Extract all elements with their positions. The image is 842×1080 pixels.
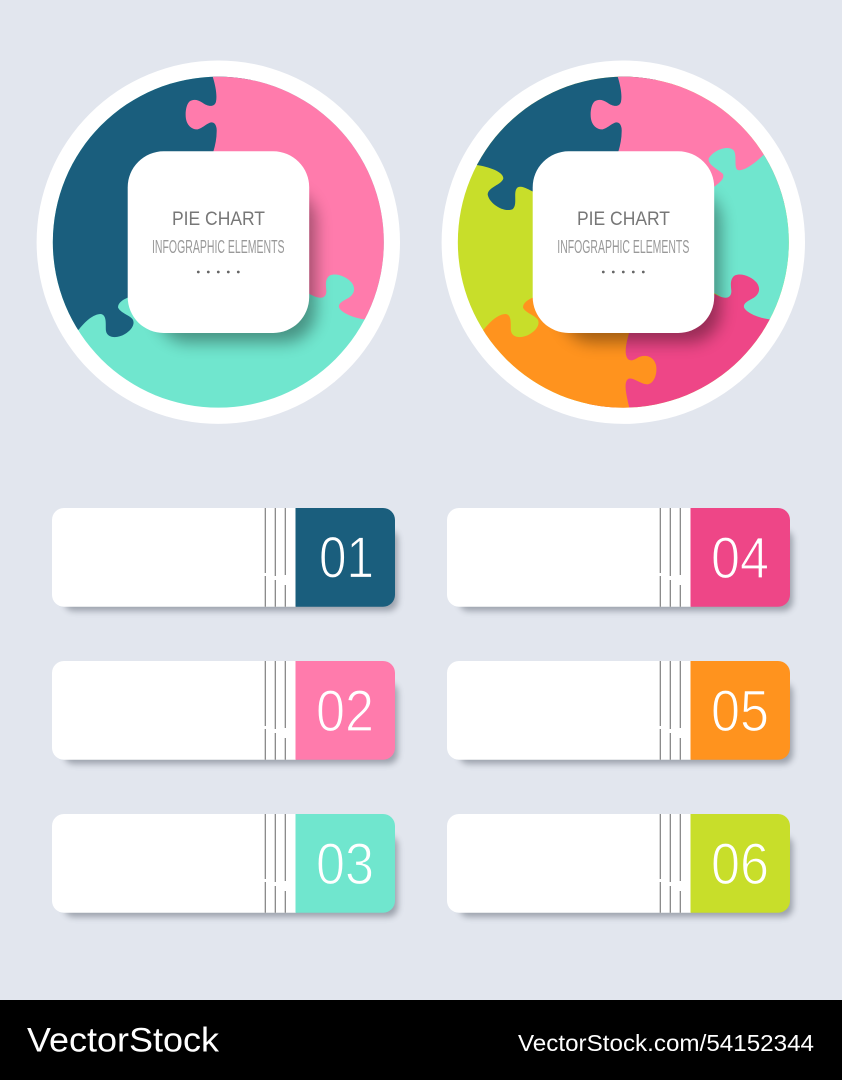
- number 04: 04: [711, 526, 769, 591]
- label bar 06: [447, 814, 793, 917]
- five dots: [602, 271, 645, 273]
- puzzle pie: three segments: [52, 76, 384, 408]
- white circle ring: [37, 60, 400, 424]
- subheading: infographic elements: INFOGRAPHIC ELEMENTS: [152, 237, 284, 257]
- number 06: 06: [711, 832, 769, 897]
- center card: [128, 151, 309, 333]
- card shadow: [562, 190, 721, 343]
- number 01: 01: [319, 526, 374, 591]
- number 02: 02: [316, 679, 374, 744]
- label bar 02: [52, 661, 398, 764]
- footer logo text: VectorStock: [27, 1022, 220, 1060]
- footer band: [0, 1000, 842, 1080]
- puzzle pie: six segments: [458, 76, 789, 408]
- number 05: 05: [711, 679, 769, 744]
- center card: [533, 151, 714, 333]
- subheading: infographic elements: INFOGRAPHIC ELEMENTS: [557, 237, 689, 257]
- label bar 01: [52, 508, 398, 611]
- white circle ring: [442, 60, 805, 424]
- footer image id: VectorStock.com/54152344: [518, 1030, 814, 1056]
- label bar 04: [447, 508, 793, 611]
- card shadow: [157, 190, 316, 343]
- panel: six-part pie chart: [442, 60, 805, 424]
- five dots: [197, 271, 240, 273]
- heading: pie chart: PIE CHART: [577, 208, 670, 230]
- heading: pie chart: PIE CHART: [172, 208, 265, 230]
- label bar 05: [447, 661, 793, 764]
- number 03: 03: [316, 832, 374, 897]
- label bar 03: [52, 814, 398, 917]
- panel: two-part pie chart: [36, 60, 400, 424]
